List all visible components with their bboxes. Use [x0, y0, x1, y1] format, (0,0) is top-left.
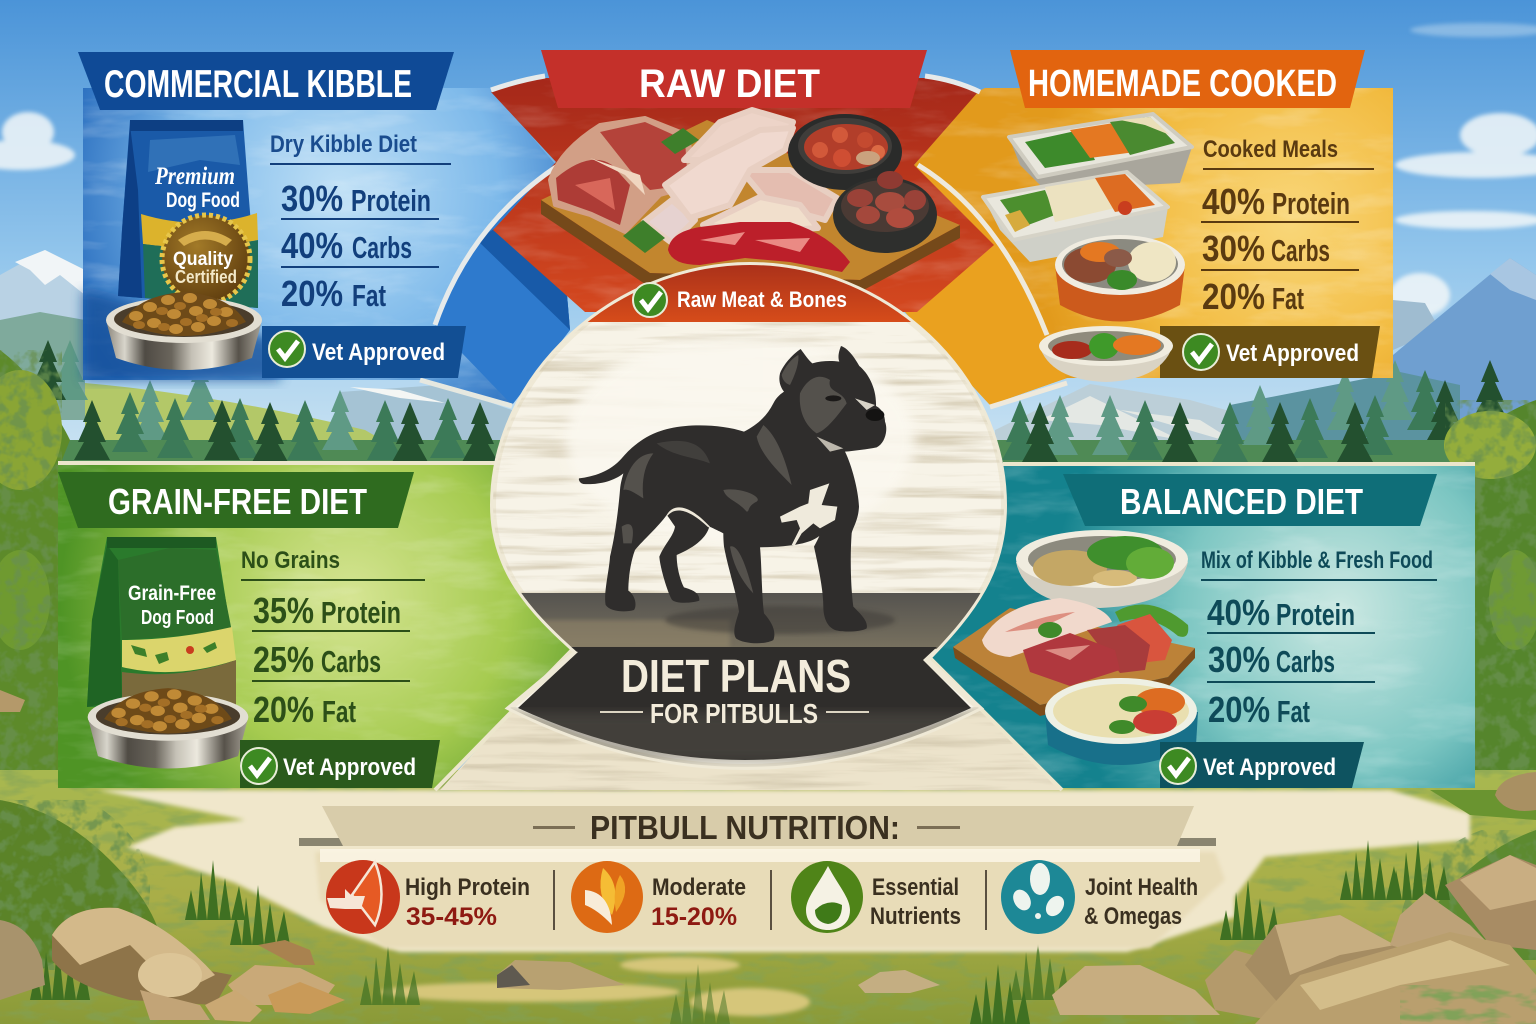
badge: vet approved: Vet Approved [1226, 340, 1359, 367]
red steak [668, 222, 850, 272]
badge: vet approved: Vet Approved [283, 754, 416, 781]
text: no grains: 20% [253, 689, 314, 730]
icon: meal containers [983, 114, 1192, 322]
text: cooked meals: Carbs [1271, 233, 1330, 268]
badge: vet approved [240, 740, 440, 788]
text: dry kibble diet: Carbs [352, 230, 412, 265]
side foliage [0, 350, 1536, 800]
text: cooked meals [1201, 136, 1374, 317]
icon: kibble bag: Quality [173, 249, 233, 270]
text: mix of kibble and fresh food: Protein [1276, 597, 1355, 632]
text: no grains [241, 547, 425, 730]
banner: balanced diet [1063, 474, 1437, 526]
panel: homemade cooked [900, 50, 1395, 408]
text: cooked meals: 20% [1202, 276, 1265, 317]
banner: grain-free diet [58, 472, 414, 528]
badge: vet approved [262, 326, 466, 378]
orange bowl [1055, 235, 1185, 322]
text: dry kibble diet: Dry Kibble Diet [270, 131, 417, 158]
banner: grain-free diet: GRAIN-FREE DIET [108, 481, 367, 522]
bowl of meat chunks [833, 171, 937, 253]
heading: pitbull nutrition [299, 806, 1216, 846]
ribbon: raw meat and bones: Raw Meat & Bones [677, 287, 847, 312]
text: mix of kibble and fresh food: 40% [1207, 592, 1270, 633]
icon: pitbull dog [579, 346, 886, 643]
nutrition item: essential nutrients [791, 861, 961, 933]
nutrition item: essential nutrients: Essential [872, 874, 959, 901]
badge: vet approved: Vet Approved [1203, 754, 1336, 781]
text: dry kibble diet: Fat [352, 278, 386, 313]
text: cooked meals: 40% [1202, 181, 1265, 222]
text: cooked meals: Fat [1272, 281, 1304, 316]
banner: raw diet: RAW DIET [639, 62, 820, 106]
chicken pieces [644, 110, 837, 243]
text: no grains: Fat [322, 694, 356, 729]
text: dry kibble diet: 20% [281, 273, 343, 314]
icon: white bowl [1039, 326, 1173, 382]
meal container two [983, 172, 1168, 262]
panel: commercial kibble [78, 52, 590, 408]
ground strip [521, 593, 980, 649]
nutrition item: moderate: 15-20% [651, 903, 737, 931]
meal container one [1009, 114, 1192, 190]
text: no grains: No Grains [241, 547, 340, 574]
nutrition item: moderate: Moderate [652, 874, 746, 901]
divider [770, 870, 772, 930]
dark lower banner [518, 647, 971, 760]
icon: kibble bowl [106, 292, 262, 370]
text: no grains: 25% [253, 639, 314, 680]
dirt path [98, 790, 1470, 952]
banner: raw diet [541, 50, 927, 108]
text: mix of kibble and fresh food: Mix of Kibble & Fresh Food [1201, 547, 1433, 574]
banner: balanced diet: BALANCED DIET [1120, 481, 1363, 522]
clouds [0, 23, 1536, 317]
rocks [0, 690, 1536, 1024]
icon: grain-free bag [87, 537, 236, 707]
nutrition item: joint health: & Omegas [1084, 903, 1182, 930]
nutrition item: high protein [326, 860, 530, 934]
text: mix of kibble and fresh food: 20% [1208, 689, 1270, 730]
text: dry kibble diet: Protein [351, 183, 431, 218]
text: cooked meals: 30% [1202, 228, 1265, 269]
badge: vet approved [1160, 326, 1380, 378]
text: cooked meals: Protein [1272, 186, 1350, 221]
icon: kibble bag: Premium [154, 163, 235, 190]
panel: raw diet [435, 50, 995, 325]
nutrition item: moderate [571, 861, 746, 933]
text: mix of kibble and fresh food [1201, 547, 1437, 730]
panel: pitbull nutrition [299, 806, 1225, 948]
marbled steak [550, 118, 695, 232]
banner: commercial kibble: COMMERCIAL KIBBLE [104, 63, 412, 106]
title: diet plans for pitbulls [600, 650, 869, 729]
badge: vet approved: Vet Approved [312, 339, 445, 366]
nutrition item: essential nutrients: Nutrients [870, 903, 961, 930]
nutrition item: joint health [1001, 860, 1198, 934]
bushes [0, 790, 1536, 1024]
green hills [85, 383, 420, 462]
text: no grains: 35% [253, 590, 314, 631]
nutrition item: joint health: Joint Health [1085, 874, 1198, 901]
title: diet plans for pitbulls: DIET PLANS [621, 650, 851, 702]
nutrition item: high protein: 35-45% [406, 903, 497, 931]
conifer forest [30, 340, 1508, 462]
ribbon: raw meat and bones [588, 265, 911, 322]
text: dry kibble diet: 40% [281, 225, 343, 266]
text: no grains: Protein [321, 595, 401, 630]
text: cooked meals: Cooked Meals [1203, 136, 1338, 163]
nutrition item: high protein: High Protein [405, 874, 530, 901]
text: mix of kibble and fresh food: Fat [1277, 694, 1310, 729]
heading: pitbull nutrition: PITBULL NUTRITION: [590, 809, 900, 846]
icon: kibble bag: Dog Food [166, 189, 240, 212]
panel: center medallion [490, 262, 1010, 767]
icon: grain-free bag: Grain-Free [128, 582, 216, 605]
banner: commercial kibble [78, 52, 454, 110]
icon: kibble bag: Certified [175, 267, 237, 287]
meadow [0, 770, 1536, 1024]
text: dry kibble diet: 30% [281, 178, 343, 219]
icon: balanced food [953, 530, 1198, 765]
icon: grain-free bag: Dog Food [141, 607, 214, 629]
title: diet plans for pitbulls: FOR PITBULLS [650, 698, 818, 729]
text: dry kibble diet [270, 131, 451, 314]
bowl of raw chunks [788, 114, 902, 190]
banner: homemade cooked: HOMEMADE COOKED [1028, 63, 1337, 105]
icon: kibble bag [118, 120, 258, 308]
divider [553, 870, 555, 930]
dog shadow [665, 606, 895, 634]
mountains [0, 250, 1536, 462]
badge: vet approved [1160, 742, 1364, 788]
text: no grains: Carbs [321, 644, 381, 679]
text: mix of kibble and fresh food: 30% [1208, 639, 1270, 680]
banner: homemade cooked [1010, 50, 1365, 108]
divider [985, 870, 987, 930]
icon: grain-free bowl [88, 688, 248, 768]
panel: grain-free diet [58, 462, 573, 792]
sunny meadow patches [380, 957, 810, 1016]
panel: balanced diet [925, 462, 1480, 792]
text: mix of kibble and fresh food: Carbs [1276, 644, 1335, 679]
icon: raw meat on board [541, 110, 960, 292]
